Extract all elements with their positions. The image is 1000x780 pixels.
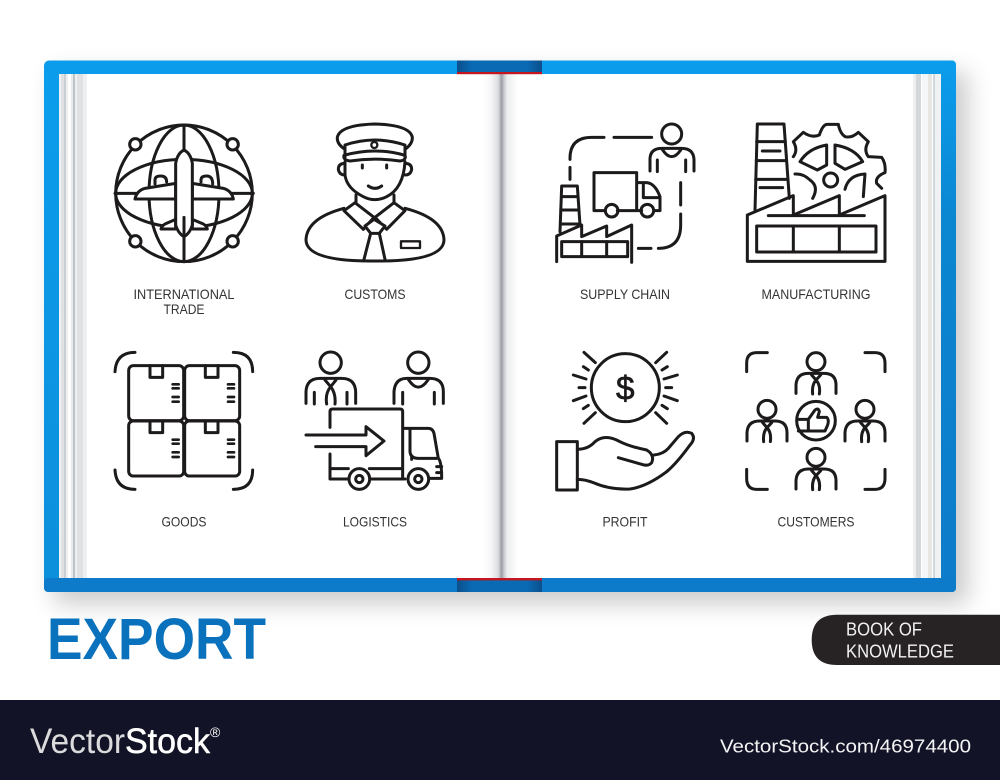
right cover band xyxy=(941,60,956,592)
book cover xyxy=(44,60,956,592)
book pages xyxy=(59,74,941,578)
footer logo: Stock xyxy=(125,722,210,761)
footer bar xyxy=(0,700,1000,780)
label: CUSTOMS xyxy=(344,286,406,302)
badge: book of knowledge: KNOWLEDGE xyxy=(846,641,954,661)
icon: supply chain loop xyxy=(557,124,694,262)
book shadow xyxy=(54,72,968,604)
icon: people and truck xyxy=(306,352,443,489)
panel: profit xyxy=(557,352,693,530)
label: INTERNATIONAL xyxy=(134,286,235,302)
left page edges xyxy=(59,74,87,578)
panel: goods xyxy=(115,352,253,530)
top spine xyxy=(457,60,542,74)
open book xyxy=(44,60,956,592)
icon: factory and gear xyxy=(747,124,885,261)
panel: international trade xyxy=(115,125,253,317)
title: EXPORT xyxy=(47,607,266,672)
icon: customers and thumbs up xyxy=(747,353,885,490)
panel: customs xyxy=(306,124,444,302)
label: CUSTOMERS xyxy=(778,514,854,530)
footer id: VectorStock.com/46974400 xyxy=(720,736,971,757)
label line 2: TRADE xyxy=(164,301,204,317)
label: SUPPLY CHAIN xyxy=(580,286,670,302)
footer logo: ® xyxy=(210,724,221,740)
panel: supply chain xyxy=(557,124,694,302)
bottom cover band xyxy=(44,578,956,592)
label: MANUFACTURING xyxy=(762,286,870,302)
panel: logistics xyxy=(306,352,443,530)
label: PROFIT xyxy=(602,514,648,530)
center gutter xyxy=(482,74,518,578)
footer logo xyxy=(30,722,221,761)
icon: boxes xyxy=(115,352,253,489)
right page edges xyxy=(913,74,941,578)
panel: manufacturing xyxy=(747,124,885,302)
panel: customers xyxy=(747,353,885,530)
footer logo: Vector xyxy=(30,722,125,761)
icon: coin and hand: $ xyxy=(616,370,635,407)
badge: book of knowledge xyxy=(812,615,1000,665)
label: GOODS xyxy=(162,514,206,530)
icon: coin and hand xyxy=(557,352,693,490)
bottom spine xyxy=(457,578,542,592)
icon: globe and plane xyxy=(115,125,253,262)
badge: book of knowledge: BOOK OF xyxy=(846,620,922,640)
icon: customs officer xyxy=(306,124,444,261)
label: LOGISTICS xyxy=(343,514,407,530)
